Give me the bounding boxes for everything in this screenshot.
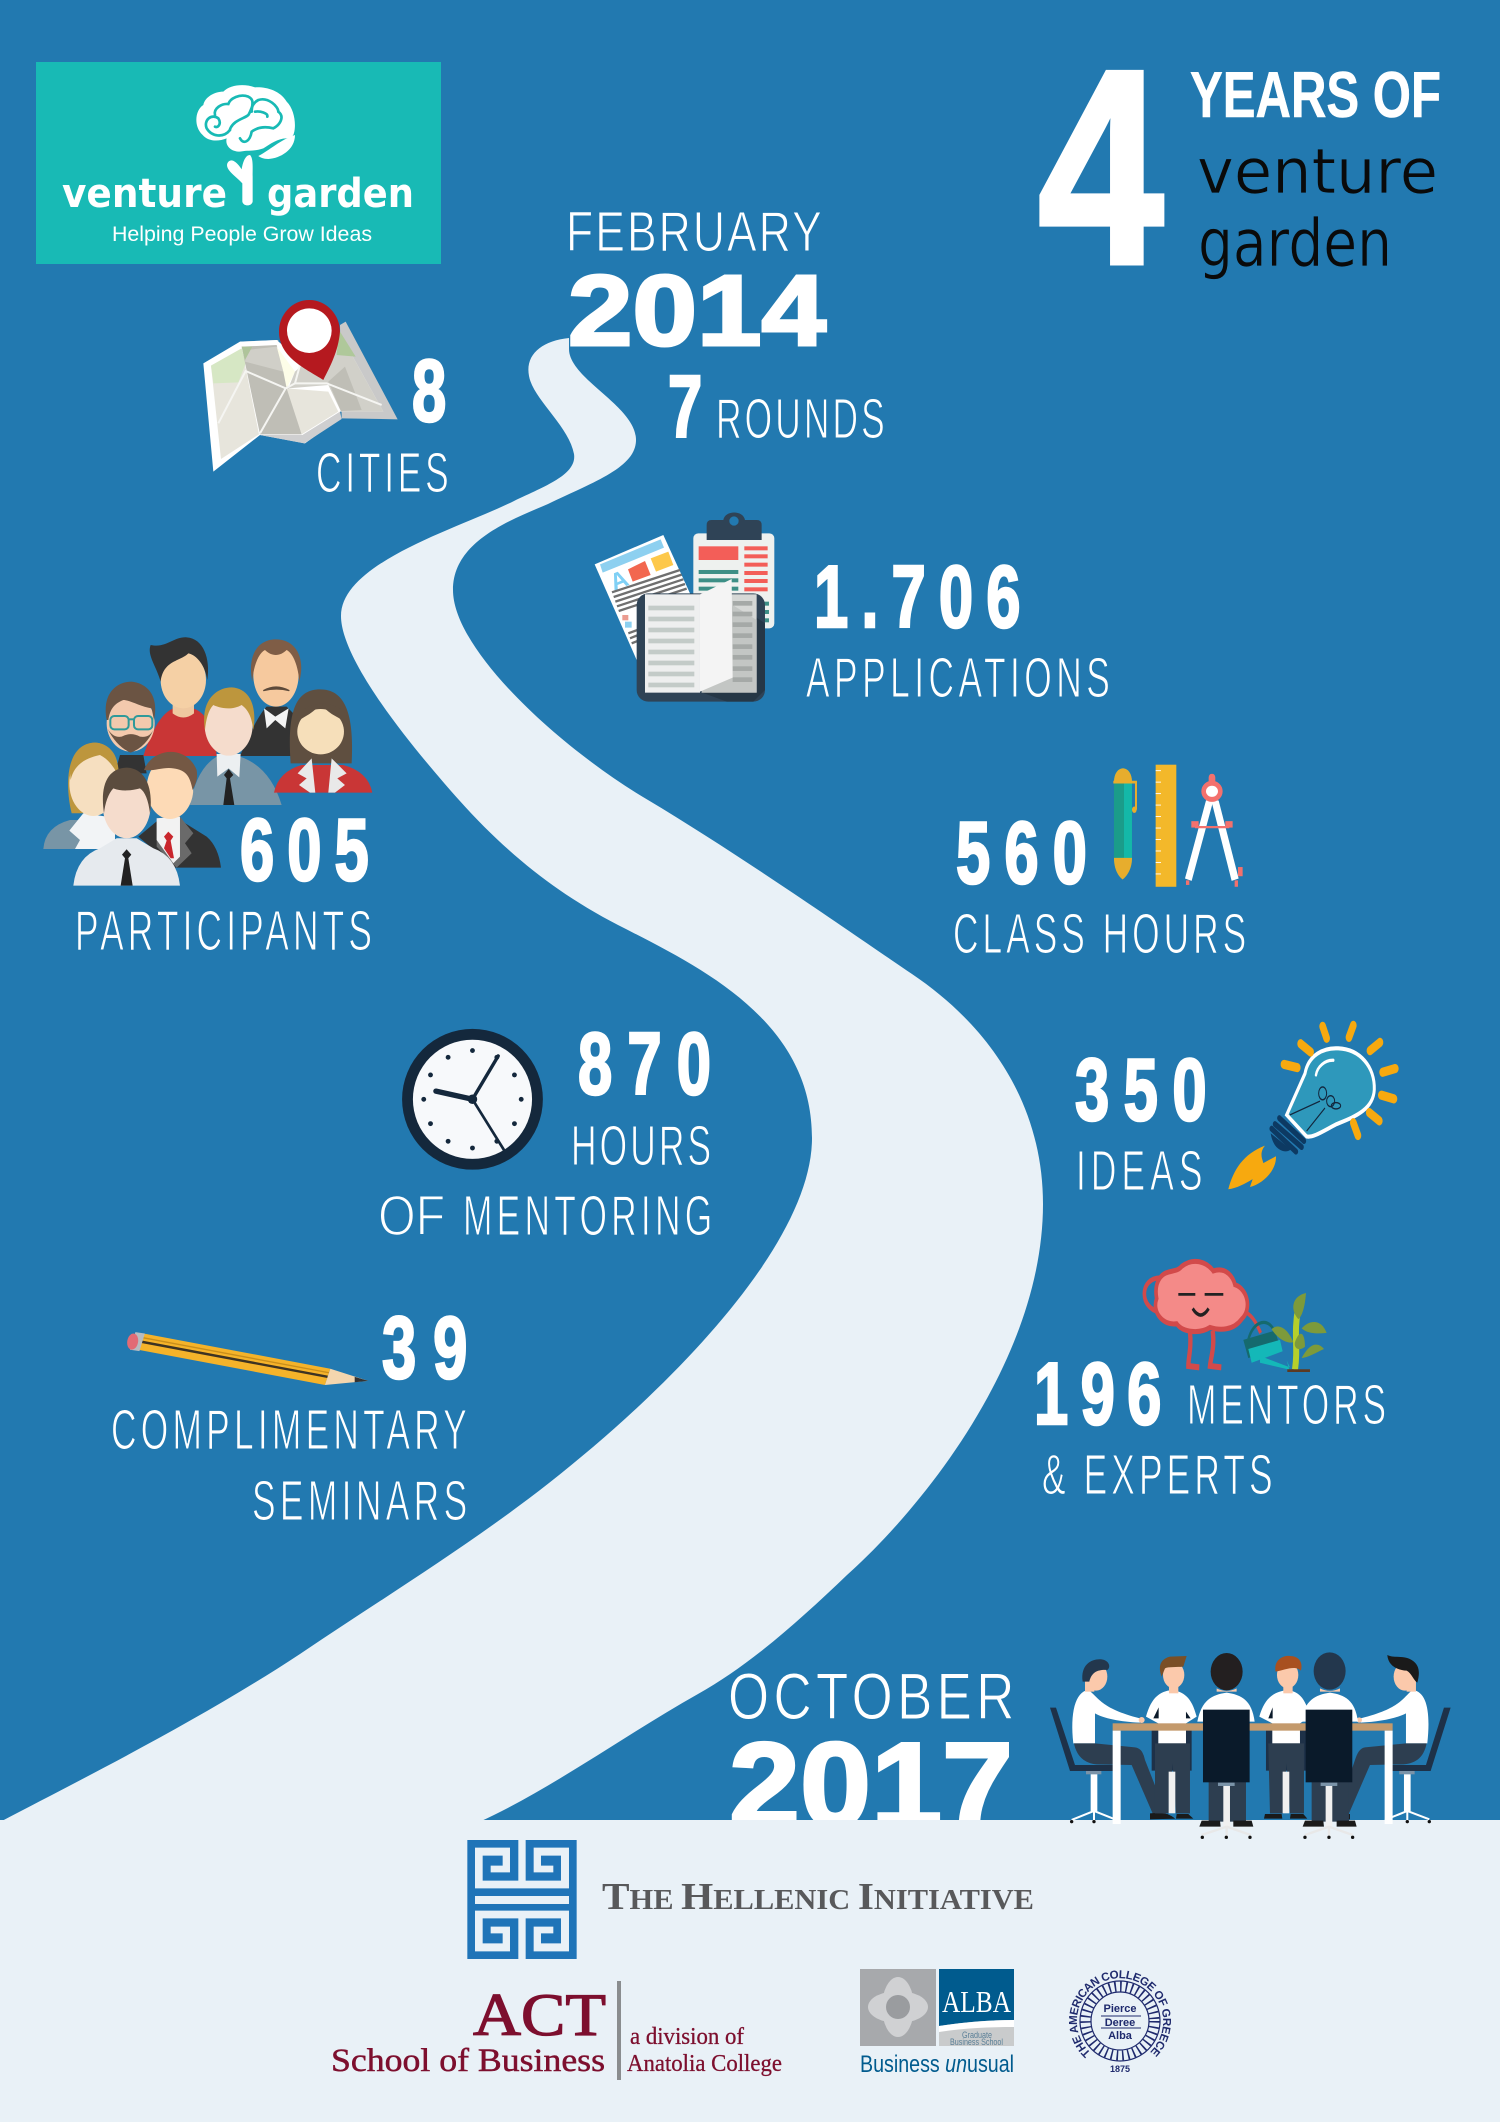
- panel: sponsors background: [0, 1820, 1500, 2122]
- logo: act school of business: ACT: [473, 1982, 606, 2048]
- icon: pencil: [126, 1332, 368, 1385]
- logo: act school of business: Anatolia College: [627, 2051, 782, 2077]
- chair right: [1385, 1708, 1451, 1823]
- stat: 1.706 applications: APPLICATIONS: [806, 647, 1110, 710]
- stat: 7 rounds: 7: [668, 358, 702, 457]
- stat: 1.706 applications: [595, 512, 1110, 710]
- person near side left: [1197, 1653, 1255, 1839]
- stat: 870 hours of mentoring: 870: [578, 1015, 711, 1114]
- year: 2014: [568, 255, 826, 367]
- stat: 8 cities: CITIES: [316, 442, 449, 505]
- big number 4: 4: [1038, 12, 1164, 322]
- person: glasses and beard: [106, 682, 155, 773]
- meeting table: [1113, 1723, 1393, 1824]
- logo tagline: Helping People Grow Ideas: [112, 223, 372, 246]
- icon: clock: [402, 1029, 543, 1170]
- icon: group of people: [43, 637, 372, 886]
- stat: 350 ideas: [1075, 1025, 1395, 1203]
- icon: folded map with pin: [203, 300, 398, 472]
- panel: venture garden logo: [36, 62, 441, 264]
- stat: 39 complimentary seminars: COMPLIMENTARY: [111, 1399, 467, 1462]
- icon: greek key square: [467, 1840, 577, 1959]
- chair left: [1050, 1708, 1115, 1823]
- illustration: meeting around table: [1050, 1652, 1451, 1839]
- stat: 870 hours of mentoring: MENTORING: [463, 1185, 712, 1248]
- icon: newspaper clipboard and book: A: [606, 565, 632, 597]
- person left side: [1072, 1659, 1175, 1819]
- stat: 870 hours of mentoring: HOURS: [571, 1115, 711, 1178]
- person near side right: [1301, 1652, 1358, 1839]
- stat: 39 complimentary seminars: SEMINARS: [252, 1470, 467, 1533]
- stat: 196 mentors and experts: 196: [1034, 1345, 1161, 1444]
- heading: 4 years of venture garden: [1038, 12, 1441, 322]
- logo: american college of greece seal: Deree: [1105, 2017, 1135, 2029]
- handwritten garden: garden: [1198, 205, 1392, 282]
- end date: october 2017: [728, 1659, 1014, 1852]
- person: dark suit red tie: [138, 752, 221, 868]
- logo: act school of business: [331, 1981, 782, 2080]
- stat: 605 participants: PARTICIPANTS: [75, 900, 372, 963]
- start date: february 2014: [566, 200, 826, 367]
- person: blond in grey suit: [190, 687, 282, 805]
- stat: 8 cities: [203, 300, 449, 505]
- stat: 196 mentors and experts: [1034, 1261, 1386, 1507]
- icon: red pin: [279, 300, 340, 380]
- person: woman in red jacket: [274, 689, 372, 793]
- stat: 1.706 applications: 1.706: [814, 548, 1020, 647]
- stat: 870 hours of mentoring: [378, 1015, 712, 1248]
- logo: the hellenic initiative: [467, 1840, 1034, 1959]
- logo wordmark venture: venture: [62, 171, 227, 217]
- stat: 39 complimentary seminars: 39: [382, 1299, 467, 1398]
- logo: american college of greece seal: 1875: [1110, 2064, 1130, 2074]
- person: red tee: [143, 637, 217, 756]
- stat: 870 hours of mentoring: OF: [378, 1184, 445, 1248]
- stat: 350 ideas: 350: [1075, 1041, 1207, 1140]
- icon: newspaper clipboard and book: [595, 512, 774, 702]
- person: front white shirt: [73, 768, 180, 886]
- stat: 605 participants: [43, 637, 372, 963]
- logo: american college of greece seal: Pierce: [1103, 2003, 1137, 2015]
- person far side left: [1146, 1656, 1197, 1819]
- stat: 7 rounds: ROUNDS: [716, 388, 885, 451]
- person: woman blond: [43, 743, 119, 849]
- stat: 39 complimentary seminars: [111, 1299, 467, 1533]
- wordmark: THE HELLENIC INITIATIVE: [602, 1876, 1034, 1918]
- logo: act school of business: School of Business: [331, 2043, 605, 2079]
- winding road timeline: [0, 338, 1043, 1822]
- month: FEBRUARY: [566, 200, 822, 263]
- handwritten venture: venture: [1197, 135, 1438, 208]
- stat: 196 mentors and experts: MENTORS: [1187, 1374, 1386, 1437]
- stat: 350 ideas: IDEAS: [1076, 1140, 1202, 1203]
- logo: alba graduate business school: Graduate: [962, 2030, 992, 2040]
- stat: 196 mentors and experts: & EXPERTS: [1042, 1444, 1273, 1507]
- icon: brain watering plant: [1144, 1261, 1327, 1371]
- icon: light bulb rocket: [1228, 1025, 1395, 1189]
- logo: alba graduate business school: Business School: [950, 2037, 1003, 2047]
- icon: brain tree: [196, 85, 295, 205]
- logo: alba graduate business school: [860, 1969, 1014, 2078]
- logo: act school of business: a division of: [630, 2024, 744, 2050]
- logo: american college of greece seal: THE AMERICAN COLLEGE OF GREECE: [1069, 1970, 1171, 2058]
- stat: 605 participants: 605: [240, 801, 369, 900]
- stat: 7 rounds: [668, 358, 885, 457]
- logo wordmark garden: garden: [267, 171, 414, 217]
- person: mustache: [240, 639, 301, 756]
- year: 2017: [729, 1718, 1013, 1852]
- person right side: [1333, 1655, 1428, 1819]
- stat: 560 class hours: CLASS HOURS: [953, 903, 1246, 966]
- logo: american college of greece seal: Alba: [1108, 2030, 1133, 2042]
- stat: 560 class hours: 560: [956, 804, 1087, 903]
- stat: 560 class hours: [953, 765, 1246, 966]
- person far side right: [1259, 1656, 1310, 1819]
- logo: alba graduate business school: ALBA: [942, 1984, 1011, 2019]
- month: OCTOBER: [728, 1659, 1014, 1733]
- icon: pen ruler compass: [1113, 765, 1243, 887]
- stat: 8 cities: 8: [412, 342, 446, 441]
- logo: alba graduate business school: Business unusual: [860, 2051, 1014, 2078]
